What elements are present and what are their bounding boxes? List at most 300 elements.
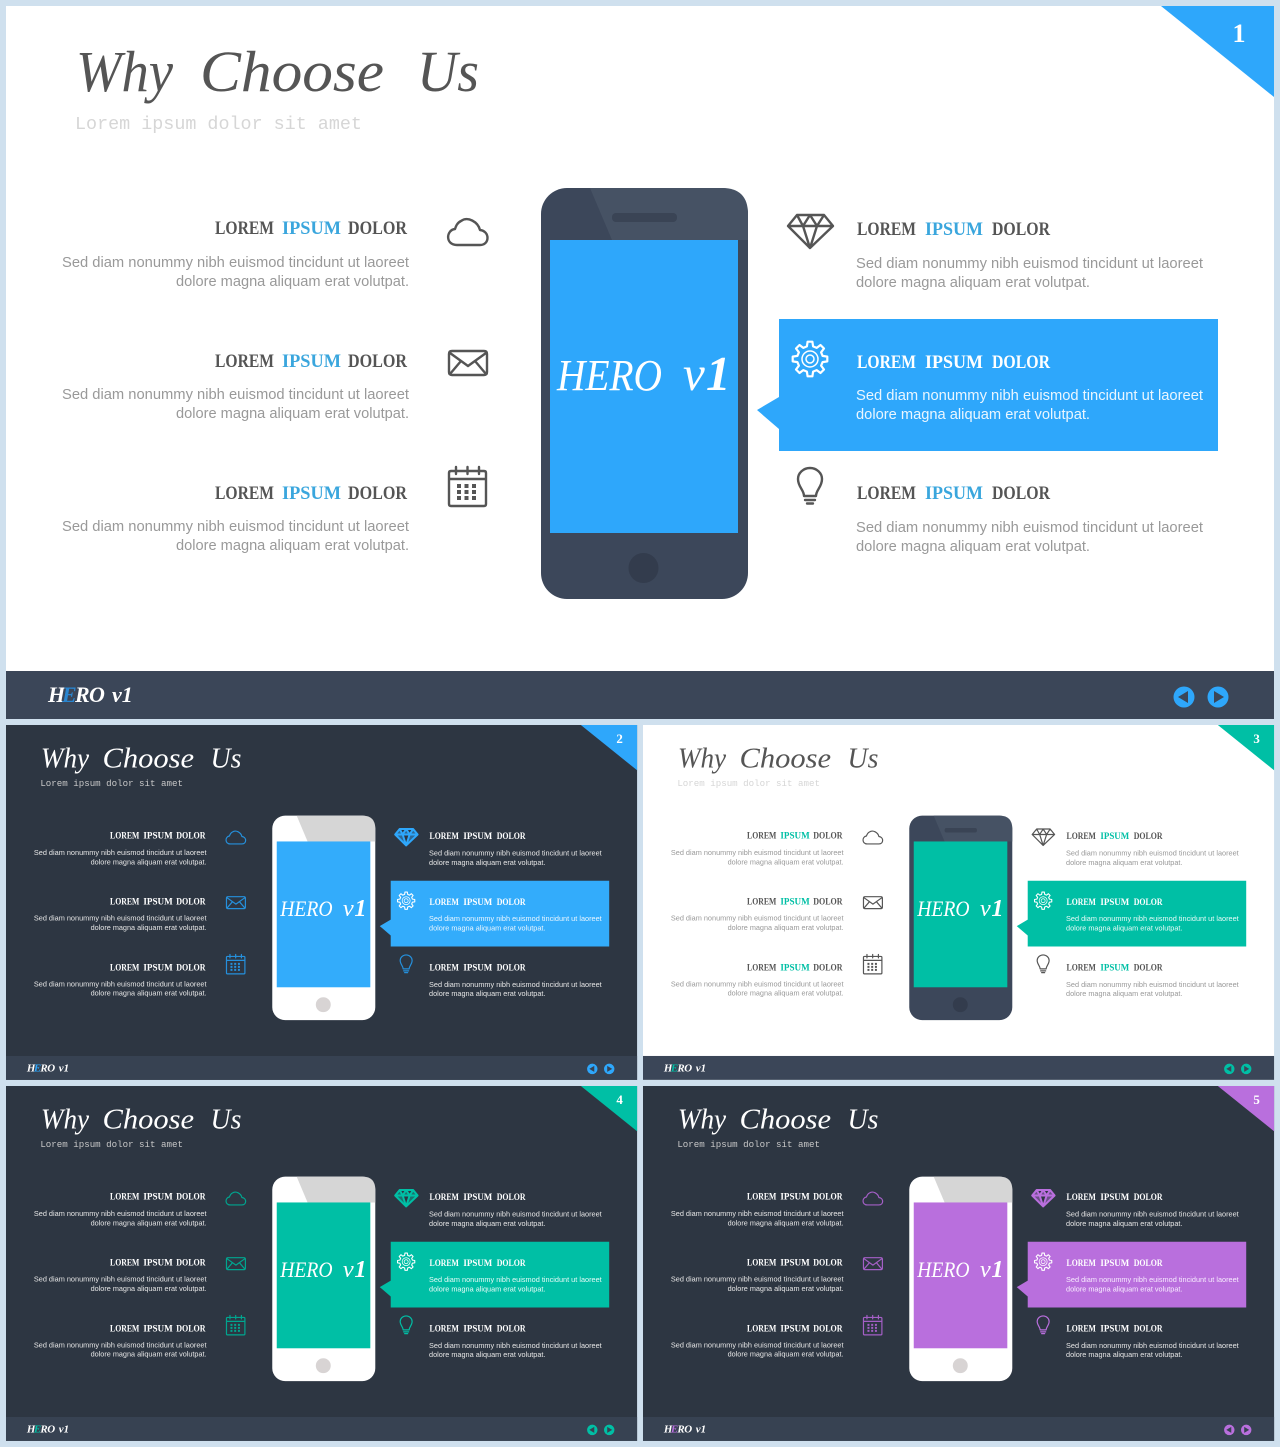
heading: LOREM — [1067, 898, 1096, 908]
description: Sed diam nonummy nibh euismod tincidunt ut laoreet — [62, 386, 410, 403]
feature: cloud — [34, 831, 246, 866]
callout box — [380, 1242, 609, 1307]
heading: LOREM — [430, 1324, 459, 1334]
description: Sed diam nonummy nibh euismod tincidunt ut laoreet — [671, 1340, 844, 1349]
nav: previous button — [1224, 1425, 1235, 1435]
panel: slide 5 — [643, 1086, 1274, 1441]
footer bar — [6, 1056, 637, 1080]
heading: DOLOR — [176, 1324, 206, 1334]
heading: DOLOR — [176, 963, 206, 973]
title: Choose — [200, 39, 384, 104]
heading: IPSUM — [925, 219, 983, 240]
footer logo: H — [47, 682, 66, 707]
heading: IPSUM — [282, 483, 341, 504]
heading: LOREM — [1067, 832, 1096, 842]
heading: DOLOR — [813, 898, 843, 908]
heading: DOLOR — [1134, 1259, 1163, 1269]
heading: LOREM — [747, 1259, 776, 1269]
phone body — [272, 816, 375, 1020]
heading: IPSUM — [780, 963, 810, 973]
heading: IPSUM — [143, 1192, 173, 1202]
heading: DOLOR — [813, 1192, 843, 1202]
description: Sed diam nonummy nibh euismod tincidunt ut laoreet — [671, 1275, 844, 1284]
heading: IPSUM — [463, 898, 492, 908]
heading: DOLOR — [1134, 963, 1163, 973]
icon: cloud — [863, 1192, 883, 1205]
title: Why — [41, 1103, 89, 1135]
phone body — [541, 188, 748, 599]
feature: bulb — [1037, 955, 1240, 998]
icon: diamond — [395, 829, 418, 845]
subtitle: Lorem ipsum dolor sit amet — [677, 778, 820, 789]
nav: next button — [1241, 1064, 1251, 1074]
title: Choose — [103, 1103, 194, 1135]
phone body — [909, 816, 1012, 1020]
phone home button — [953, 1358, 968, 1373]
heading: LOREM — [215, 351, 274, 372]
footer logo: O — [47, 1423, 55, 1435]
description: Sed diam nonummy nibh euismod tincidunt ut laoreet — [429, 1341, 603, 1350]
icon: gear — [793, 342, 827, 376]
panel: slide 4 — [6, 1086, 637, 1441]
description: dolore magna aliquam erat volutpat. — [728, 1350, 844, 1359]
callout box — [757, 319, 1218, 451]
heading: IPSUM — [463, 1193, 492, 1203]
screen label: 1 — [991, 895, 1004, 922]
feature: cloud — [62, 218, 488, 290]
footer logo: v1 — [112, 682, 133, 707]
heading: IPSUM — [1100, 832, 1129, 842]
footer logo: R — [74, 682, 90, 707]
heading: LOREM — [1067, 1193, 1096, 1203]
heading: LOREM — [110, 1259, 139, 1269]
description: Sed diam nonummy nibh euismod tincidunt ut laoreet — [671, 848, 844, 857]
description: dolore magna aliquam erat volutpat. — [429, 924, 546, 933]
heading: LOREM — [110, 831, 139, 841]
heading: DOLOR — [497, 963, 526, 973]
corner tab — [1218, 725, 1274, 770]
heading: LOREM — [430, 1259, 459, 1269]
footer logo: E — [670, 1062, 678, 1074]
heading: LOREM — [1067, 1259, 1096, 1269]
heading: DOLOR — [176, 1192, 206, 1202]
footer logo: H — [663, 1062, 673, 1074]
heading: IPSUM — [463, 1324, 492, 1334]
description: Sed diam nonummy nibh euismod tincidunt ut laoreet — [34, 1209, 207, 1218]
description: Sed diam nonummy nibh euismod tincidunt ut laoreet — [34, 914, 207, 923]
icon: light bulb — [798, 468, 822, 504]
phone screen — [550, 240, 738, 533]
description: dolore magna aliquam erat volutpat. — [429, 1285, 546, 1294]
phone top sheen — [297, 1177, 375, 1202]
description: dolore magna aliquam erat volutpat. — [91, 1218, 207, 1227]
feature: bulb — [400, 955, 603, 998]
corner tab — [581, 1086, 637, 1131]
description: dolore magna aliquam erat volutpat. — [1066, 1350, 1183, 1359]
heading: IPSUM — [1100, 898, 1129, 908]
description: dolore magna aliquam erat volutpat. — [91, 989, 207, 998]
corner tab — [1218, 1086, 1274, 1131]
screen label: HERO — [916, 896, 970, 921]
heading: LOREM — [110, 898, 139, 908]
footer bar — [643, 1056, 1274, 1080]
phone — [909, 816, 1012, 1020]
heading: DOLOR — [497, 1193, 526, 1203]
icon: calendar — [863, 1315, 882, 1335]
heading: IPSUM — [1100, 963, 1129, 973]
footer logo: O — [684, 1062, 692, 1074]
icon: calendar — [226, 1315, 245, 1335]
phone — [909, 1177, 1012, 1381]
heading: LOREM — [430, 832, 459, 842]
subtitle: Lorem ipsum dolor sit amet — [40, 1139, 183, 1150]
description: dolore magna aliquam erat volutpat. — [429, 1219, 546, 1228]
screen label: HERO — [916, 1257, 970, 1282]
slide background — [643, 1086, 1274, 1441]
description: Sed diam nonummy nibh euismod tincidunt ut laoreet — [671, 1209, 844, 1218]
callout box — [1017, 881, 1246, 946]
phone screen — [914, 1202, 1007, 1348]
slide number: 3 — [1253, 731, 1260, 746]
heading: DOLOR — [1134, 832, 1163, 842]
slide number: 5 — [1253, 1092, 1260, 1107]
phone body — [909, 1177, 1012, 1381]
feature: mail — [34, 897, 245, 932]
title: Why — [76, 39, 173, 104]
nav: previous button — [587, 1064, 598, 1074]
heading: IPSUM — [1100, 1324, 1129, 1334]
heading: DOLOR — [1134, 1193, 1163, 1203]
nav: next button — [1241, 1425, 1251, 1435]
heading: IPSUM — [925, 483, 983, 504]
feature: bulb — [798, 468, 1204, 555]
footer logo: R — [39, 1062, 48, 1074]
heading: IPSUM — [780, 898, 810, 908]
heading: DOLOR — [497, 1324, 526, 1334]
heading: DOLOR — [1134, 898, 1163, 908]
slide number: 1 — [1232, 19, 1246, 48]
icon: light bulb — [1037, 955, 1049, 973]
feature: mail — [671, 1258, 882, 1293]
phone top sheen — [297, 816, 375, 841]
heading: DOLOR — [176, 1259, 206, 1269]
description: Sed diam nonummy nibh euismod tincidunt ut laoreet — [429, 914, 603, 923]
footer bar — [643, 1417, 1274, 1441]
feature: mail — [34, 1258, 245, 1293]
heading: IPSUM — [463, 963, 492, 973]
description: Sed diam nonummy nibh euismod tincidunt ut laoreet — [1066, 1275, 1240, 1284]
footer logo: R — [676, 1423, 685, 1435]
description: dolore magna aliquam erat volutpat. — [91, 857, 207, 866]
footer logo: H — [663, 1423, 673, 1435]
title: Why — [41, 742, 89, 774]
screen label: HERO — [279, 1257, 333, 1282]
screen label: v — [343, 895, 354, 922]
heading: LOREM — [857, 352, 916, 373]
heading: DOLOR — [176, 831, 206, 841]
panel: slide 2 — [6, 725, 637, 1080]
description: dolore magna aliquam erat volutpat. — [91, 1284, 207, 1293]
title: Choose — [103, 742, 194, 774]
callout box — [1017, 1242, 1246, 1307]
description: Sed diam nonummy nibh euismod tincidunt ut laoreet — [34, 848, 207, 857]
description: Sed diam nonummy nibh euismod tincidunt ut laoreet — [429, 1209, 603, 1218]
heading: DOLOR — [992, 352, 1050, 373]
footer logo: v1 — [696, 1062, 706, 1074]
description: Sed diam nonummy nibh euismod tincidunt ut laoreet — [429, 980, 603, 989]
title: Why — [678, 1103, 726, 1135]
title: Us — [211, 742, 241, 774]
icon: calendar — [863, 954, 882, 974]
feature: calendar — [671, 954, 882, 998]
heading: LOREM — [747, 1324, 776, 1334]
footer logo: H — [26, 1062, 36, 1074]
description: dolore magna aliquam erat volutpat. — [728, 1218, 844, 1227]
slide number: 4 — [616, 1092, 623, 1107]
heading: LOREM — [215, 483, 274, 504]
description: dolore magna aliquam erat volutpat. — [91, 923, 207, 932]
screen label: HERO — [556, 351, 662, 400]
description: Sed diam nonummy nibh euismod tincidunt ut laoreet — [671, 914, 844, 923]
screen label: 1 — [354, 1256, 367, 1283]
footer logo: E — [670, 1423, 678, 1435]
heading: IPSUM — [282, 351, 341, 372]
phone top sheen — [934, 1177, 1012, 1202]
phone top sheen — [934, 816, 1012, 841]
icon: calendar — [449, 467, 486, 506]
screen label: v — [980, 895, 991, 922]
subtitle: Lorem ipsum dolor sit amet — [677, 1139, 820, 1150]
title: Us — [848, 742, 878, 774]
heading: LOREM — [747, 898, 776, 908]
icon: cloud — [448, 219, 488, 245]
heading: IPSUM — [1100, 1193, 1129, 1203]
slide background — [643, 725, 1274, 1080]
description: dolore magna aliquam erat volutpat. — [429, 989, 546, 998]
description: dolore magna aliquam erat volutpat. — [429, 858, 546, 867]
nav: previous button — [1174, 686, 1194, 708]
panel: slide 1 — [6, 6, 1274, 719]
description: Sed diam nonummy nibh euismod tincidunt ut laoreet — [34, 979, 207, 988]
corner tab — [1161, 6, 1274, 97]
description: dolore magna aliquam erat volutpat. — [856, 406, 1090, 423]
description: Sed diam nonummy nibh euismod tincidunt ut laoreet — [429, 848, 603, 857]
phone home button — [316, 1358, 331, 1373]
corner tab — [581, 725, 637, 770]
feature: diamond — [395, 829, 603, 867]
description: dolore magna aliquam erat volutpat. — [91, 1350, 207, 1359]
footer bar — [6, 1417, 637, 1441]
heading: IPSUM — [463, 1259, 492, 1269]
phone — [272, 816, 375, 1020]
feature: cloud — [671, 1192, 883, 1227]
footer logo: H — [26, 1423, 36, 1435]
heading: LOREM — [1067, 1324, 1096, 1334]
screen label: v — [683, 346, 705, 401]
callout: gear feature — [1017, 1242, 1246, 1307]
icon: cloud — [226, 831, 246, 844]
icon: cloud — [226, 1192, 246, 1205]
subtitle: Lorem ipsum dolor sit amet — [40, 778, 183, 789]
heading: DOLOR — [497, 1259, 526, 1269]
description: dolore magna aliquam erat volutpat. — [176, 405, 409, 422]
title: Choose — [740, 1103, 831, 1135]
screen label: HERO — [279, 896, 333, 921]
heading: LOREM — [747, 831, 776, 841]
heading: IPSUM — [780, 831, 810, 841]
heading: IPSUM — [1100, 1259, 1129, 1269]
phone home button — [316, 997, 331, 1012]
icon: envelope — [226, 1258, 245, 1270]
icon: envelope — [226, 897, 245, 909]
heading: LOREM — [215, 218, 274, 239]
description: dolore magna aliquam erat volutpat. — [176, 537, 409, 554]
icon: gear — [1035, 1253, 1052, 1270]
heading: DOLOR — [813, 1324, 843, 1334]
description: Sed diam nonummy nibh euismod tincidunt ut laoreet — [856, 387, 1204, 404]
feature: diamond — [788, 215, 1204, 291]
phone top sheen — [590, 188, 748, 240]
screen label: 1 — [991, 1256, 1004, 1283]
description: Sed diam nonummy nibh euismod tincidunt ut laoreet — [62, 254, 410, 271]
icon: diamond — [1032, 829, 1055, 845]
description: dolore magna aliquam erat volutpat. — [1066, 1219, 1183, 1228]
heading: LOREM — [430, 898, 459, 908]
icon: cloud — [863, 831, 883, 844]
description: Sed diam nonummy nibh euismod tincidunt ut laoreet — [429, 1275, 603, 1284]
slide background — [6, 725, 637, 1080]
feature: mail — [62, 351, 487, 422]
callout: gear feature — [380, 1242, 609, 1307]
footer logo: R — [39, 1423, 48, 1435]
heading: LOREM — [1067, 963, 1096, 973]
heading: IPSUM — [143, 963, 173, 973]
heading: LOREM — [857, 219, 916, 240]
heading: IPSUM — [143, 898, 173, 908]
screen label: 1 — [706, 346, 730, 401]
heading: IPSUM — [780, 1324, 810, 1334]
icon: gear — [398, 892, 415, 909]
subtitle: Lorem ipsum dolor sit amet — [75, 114, 362, 135]
heading: IPSUM — [143, 831, 173, 841]
heading: LOREM — [430, 963, 459, 973]
heading: LOREM — [747, 1192, 776, 1202]
feature: bulb — [400, 1316, 603, 1359]
icon: calendar — [226, 954, 245, 974]
phone screen — [914, 841, 1007, 987]
phone screen — [277, 1202, 370, 1348]
screen label: 1 — [354, 895, 367, 922]
icon: gear — [398, 1253, 415, 1270]
heading: LOREM — [110, 1324, 139, 1334]
heading: IPSUM — [780, 1192, 810, 1202]
callout: gear feature — [1017, 881, 1246, 946]
heading: DOLOR — [992, 483, 1050, 504]
heading: IPSUM — [143, 1324, 173, 1334]
description: dolore magna aliquam erat volutpat. — [728, 857, 844, 866]
feature: calendar — [34, 1315, 245, 1359]
callout box — [380, 881, 609, 946]
slide number: 2 — [616, 731, 623, 746]
icon: diamond — [788, 215, 833, 248]
footer logo: O — [89, 682, 105, 707]
feature: calendar — [62, 467, 486, 554]
icon: gear — [1035, 892, 1052, 909]
icon: diamond — [1032, 1190, 1055, 1206]
feature: calendar — [671, 1315, 882, 1359]
title: Choose — [740, 742, 831, 774]
footer logo: E — [33, 1423, 41, 1435]
icon: light bulb — [400, 1316, 412, 1334]
title: Us — [417, 39, 479, 104]
phone home button — [953, 997, 968, 1012]
description: Sed diam nonummy nibh euismod tincidunt ut laoreet — [1066, 980, 1240, 989]
description: dolore magna aliquam erat volutpat. — [1066, 858, 1183, 867]
description: dolore magna aliquam erat volutpat. — [856, 538, 1090, 555]
footer logo: v1 — [59, 1423, 69, 1435]
slide background — [6, 1086, 637, 1441]
description: Sed diam nonummy nibh euismod tincidunt ut laoreet — [1066, 1341, 1240, 1350]
heading: DOLOR — [992, 219, 1050, 240]
heading: DOLOR — [348, 351, 407, 372]
description: dolore magna aliquam erat volutpat. — [728, 1284, 844, 1293]
footer bar — [6, 671, 1274, 719]
phone screen — [277, 841, 370, 987]
description: dolore magna aliquam erat volutpat. — [1066, 989, 1183, 998]
icon: light bulb — [1037, 1316, 1049, 1334]
nav: next button — [1208, 686, 1228, 708]
footer logo: E — [33, 1062, 41, 1074]
heading: IPSUM — [780, 1259, 810, 1269]
heading: DOLOR — [497, 832, 526, 842]
feature: calendar — [34, 954, 245, 998]
feature: cloud — [671, 831, 883, 866]
heading: DOLOR — [813, 1259, 843, 1269]
icon: envelope — [863, 1258, 882, 1270]
heading: DOLOR — [1134, 1324, 1163, 1334]
feature: diamond — [395, 1190, 603, 1228]
phone — [541, 188, 748, 599]
description: Sed diam nonummy nibh euismod tincidunt ut laoreet — [1066, 914, 1240, 923]
description: Sed diam nonummy nibh euismod tincidunt ut laoreet — [34, 1340, 207, 1349]
footer logo: O — [47, 1062, 55, 1074]
description: Sed diam nonummy nibh euismod tincidunt ut laoreet — [1066, 1209, 1240, 1218]
heading: LOREM — [110, 1192, 139, 1202]
heading: DOLOR — [348, 483, 407, 504]
feature: bulb — [1037, 1316, 1240, 1359]
footer logo: v1 — [696, 1423, 706, 1435]
description: dolore magna aliquam erat volutpat. — [1066, 1285, 1183, 1294]
description: dolore magna aliquam erat volutpat. — [856, 274, 1090, 291]
footer logo: R — [676, 1062, 685, 1074]
title: Us — [848, 1103, 878, 1135]
description: Sed diam nonummy nibh euismod tincidunt ut laoreet — [856, 255, 1204, 272]
heading: LOREM — [747, 963, 776, 973]
nav: next button — [604, 1064, 614, 1074]
description: dolore magna aliquam erat volutpat. — [429, 1350, 546, 1359]
phone speaker — [612, 213, 677, 222]
phone — [272, 1177, 375, 1381]
heading: DOLOR — [176, 898, 206, 908]
phone home button — [628, 553, 658, 583]
phone speaker — [945, 828, 977, 832]
screen label: v — [980, 1256, 991, 1283]
feature: diamond — [1032, 829, 1240, 867]
feature: diamond — [1032, 1190, 1240, 1228]
description: Sed diam nonummy nibh euismod tincidunt ut laoreet — [671, 979, 844, 988]
callout: gear feature — [380, 881, 609, 946]
feature: cloud — [34, 1192, 246, 1227]
